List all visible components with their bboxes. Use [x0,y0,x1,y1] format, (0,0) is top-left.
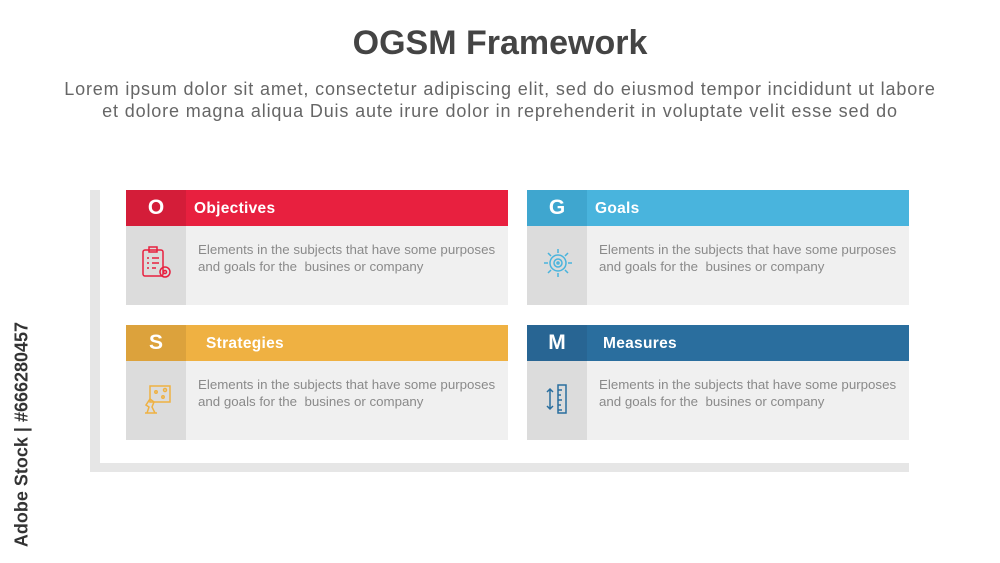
card: strategies [126,325,508,440]
card: objectives: O [148,196,164,219]
card: measures [527,325,909,440]
card: measures: Elements in the subjects that have some purposes [599,377,896,392]
icon: chess board [145,385,171,414]
side watermark text: Adobe Stock | #666280457 [12,322,32,547]
card: objectives: Elements in the subjects that have some purposes [198,242,495,257]
icon: clipboard [142,246,171,278]
card: goals: Elements in the subjects that have some purposes [599,242,896,257]
card: strategies: S [149,331,163,354]
card: goals [527,190,909,305]
title: OGSM Framework [353,24,647,62]
card: measures: Measures [603,335,677,352]
card: strategies: Elements in the subjects that have some purposes [198,377,495,392]
subtitle: et dolore magna aliqua Duis aute irure dolor in reprehenderit in voluptate velit esse sed do [102,101,898,121]
icon: ruler [546,384,567,414]
card: measures: and goals for the busines or company [599,394,824,409]
card: goals: Goals [595,200,640,217]
icon: target [544,249,572,277]
subtitle [64,79,936,121]
axis frame [90,190,100,472]
card: goals: and goals for the busines or company [599,259,824,274]
card: objectives: Objectives [194,200,275,217]
card: strategies: Strategies [206,335,284,352]
card: objectives: and goals for the busines or company [198,259,423,274]
card: objectives [126,190,508,305]
card: measures: M [548,331,566,354]
card: strategies: and goals for the busines or company [198,394,423,409]
card: goals: G [549,196,565,219]
subtitle: Lorem ipsum dolor sit amet, consectetur adipiscing elit, sed do eiusmod tempor incididunt ut labore [64,79,936,99]
